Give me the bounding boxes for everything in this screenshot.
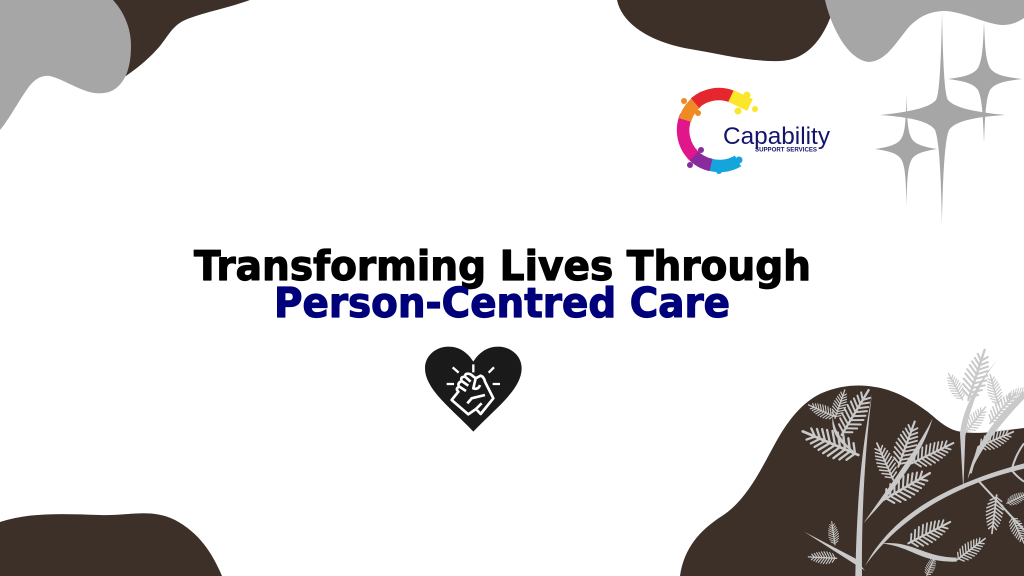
heart [425,347,522,432]
blob: bottom-right brown [680,385,1024,576]
blob: top-left gray [0,0,131,130]
logo: wordmark: Capability [723,123,830,150]
logo: Capability Support Services [681,92,830,174]
logo: puzzle knobs [681,92,758,174]
blob: top-left brown [80,0,250,80]
rays [447,364,500,384]
blob: top-right gray [825,0,1024,62]
title line 2: Person-Centred Care [274,279,730,327]
logo: tagline: SUPPORT SERVICES [755,146,817,154]
clasped hands [452,374,493,414]
icon: heart with clasped hands [425,347,522,432]
sparkle: upper right [948,22,1022,143]
title line 1: Transforming Lives Through [194,242,811,290]
fern: main stems [804,393,1024,576]
sparkles icon [875,12,1022,225]
blob: top-centre brown [617,0,836,61]
fern: fronds [798,384,1024,576]
logo: puzzle ring [683,94,750,166]
fern: light upper branches [943,346,1024,491]
title [194,242,811,327]
blob: bottom-left brown [0,513,222,576]
illustration: fern branches [798,346,1024,576]
sparkle: lower left [875,93,937,207]
sparkle: large [880,12,1005,225]
